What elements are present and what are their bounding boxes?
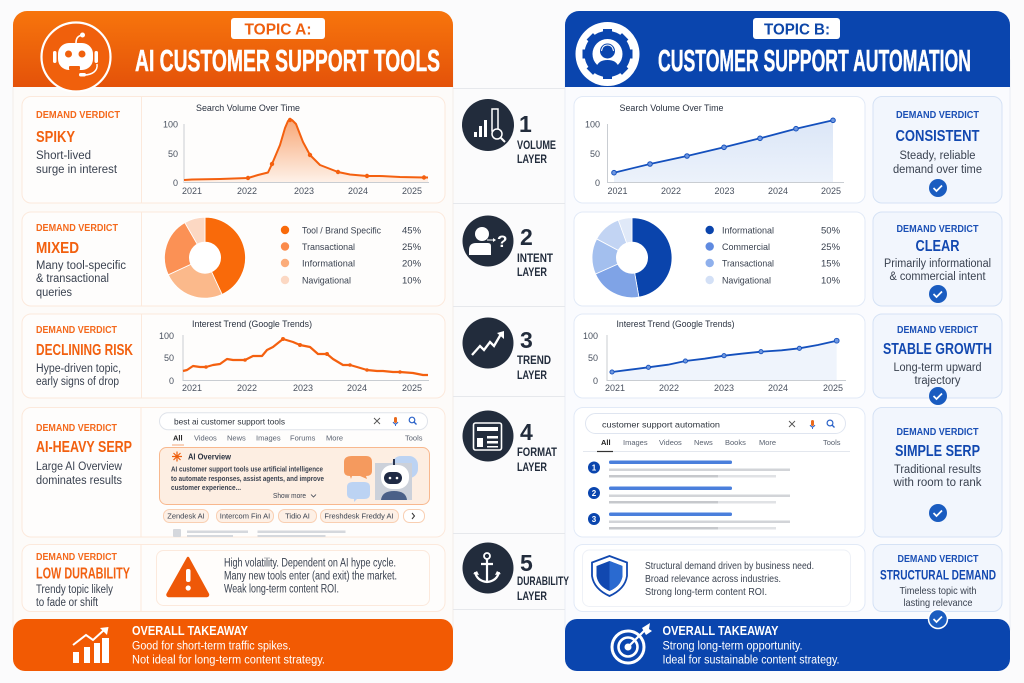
verdict: structural demand: Timeless topic with (900, 585, 977, 597)
verdict: spiky: SPIKY (36, 129, 76, 146)
note box: risks: Many new tools enter (and exit) the market. (224, 570, 397, 582)
verdict: mixed: & transactional (36, 273, 109, 285)
result 2: 2 (592, 489, 597, 498)
row: B durability (574, 544, 1002, 612)
header: topic A (13, 11, 453, 92)
note box: strengths: Structural demand driven by business need. (645, 561, 814, 572)
AI overview box: to automate responses, assist agents, and improve (171, 476, 324, 483)
row: B format (574, 408, 1002, 537)
verdict: low durability: DEMAND VERDICT (36, 552, 117, 563)
note box: risks: High volatility. Dependent on AI hype cycle. (224, 558, 396, 570)
row: A durability (22, 544, 445, 612)
line chart: interest trend A: 100 (159, 331, 174, 341)
donut chart and legend: intent B: 10% (821, 276, 841, 286)
line chart: search volume B: 0 (595, 178, 600, 188)
verdict: spiky (36, 110, 120, 176)
layer 3: trend: LAYER (517, 370, 548, 382)
layer 1: volume: LAYER (517, 154, 548, 166)
verdict: low durability: LOW DURABILITY (36, 566, 130, 582)
tabs A: Forums (290, 434, 316, 442)
takeaway: B: Strong long-term opportunity. (662, 640, 802, 652)
search result mockup B: News (694, 438, 713, 447)
line chart: search volume B: 50 (590, 149, 600, 159)
layer 3: trend: 3 (520, 327, 533, 353)
legend: intent A (281, 226, 422, 286)
note box: strengths (574, 544, 865, 612)
line chart: search volume A: 2025 (402, 186, 422, 196)
icon: robot headset (42, 22, 110, 92)
legend: intent A: Informational (302, 258, 355, 270)
donut chart and legend: intent B: Navigational (722, 276, 771, 286)
note box: risks (156, 550, 430, 606)
chips A: Freshdesk Freddy AI (324, 512, 394, 520)
line chart: interest trend B: Interest Trend (Google Trends) (616, 319, 734, 330)
row: B volume (574, 96, 1002, 203)
verdict: consistent: CONSISTENT (896, 128, 980, 145)
line chart: search volume B: 2022 (661, 186, 681, 196)
title: topic A: AI CUSTOMER SUPPORT TOOLS (135, 43, 440, 78)
verdict: AI-heavy SERP (36, 423, 132, 487)
icon: check (929, 179, 947, 197)
verdict: spiky: surge in interest (36, 164, 118, 176)
line chart: interest trend A (159, 319, 429, 393)
icon: warning (167, 558, 208, 596)
layer 2: intent: INTENT (517, 253, 553, 265)
line chart: search volume B (574, 96, 865, 203)
takeaway: A: Not ideal for long-term content strategy. (132, 654, 325, 666)
search result mockup B: Books (725, 438, 746, 447)
column: analysis layers (453, 88, 569, 610)
line chart: search volume B: 2025 (821, 186, 841, 196)
line chart: search volume A: 2021 (182, 186, 202, 196)
tabs A: Images (256, 434, 281, 442)
line chart: search volume A: 2024 (348, 186, 368, 196)
verdict: mixed: queries (36, 287, 72, 299)
verdict: low durability (36, 552, 130, 609)
icon: target (612, 623, 652, 663)
donut chart and legend: intent B: 15% (821, 258, 841, 270)
row: A intent (22, 212, 445, 306)
search result mockup B: All (601, 438, 611, 447)
donut chart and legend: intent B (574, 212, 865, 306)
line chart: interest trend B: 0 (593, 376, 598, 386)
chips A: Zendesk AI (167, 512, 205, 520)
donut chart: intent A (165, 217, 245, 298)
verdict: AI-heavy SERP: dominates results (36, 475, 122, 487)
icon: check (929, 285, 947, 303)
layer 3: trend: TREND (517, 355, 551, 367)
search result mockup B: More (759, 438, 776, 447)
line chart: interest trend B: 2021 (605, 383, 625, 393)
verdict: simple SERP (873, 408, 1002, 537)
search result mockup B: Tools (823, 438, 841, 447)
verdict: spiky: Short-lived (36, 150, 91, 162)
chips A: Tidio AI (285, 512, 310, 520)
result 3: 3 (592, 515, 597, 524)
layer 5: durability (462, 542, 569, 603)
legend: intent A: Tool / Brand Specific (302, 226, 381, 236)
row: B trend (574, 314, 1002, 405)
verdict: AI-heavy SERP: Large AI Overview (36, 461, 123, 473)
layer 2: intent: LAYER (517, 267, 548, 279)
icon: gear agent (576, 22, 640, 86)
note box: strengths: Broad relevance across industries. (645, 574, 781, 585)
row: A format (22, 408, 445, 537)
result 3 (588, 512, 790, 530)
verdict: declining risk: DEMAND VERDICT (36, 325, 117, 336)
search result mockup B: Videos (659, 438, 682, 447)
header: topic B (565, 11, 1010, 87)
takeaway: B (565, 619, 1010, 671)
donut chart and legend: intent B: 50% (821, 226, 841, 236)
chips A: Intercom Fin AI (220, 512, 270, 520)
row: B intent (574, 212, 1002, 306)
line chart: search volume B: 100 (585, 120, 600, 130)
verdict: simple SERP: DEMAND VERDICT (896, 427, 978, 438)
verdict: low durability: Trendy topic likely (36, 584, 113, 596)
line chart: search volume B: 2024 (768, 186, 788, 196)
verdict: declining risk: Hype-driven topic, (36, 363, 121, 375)
note box: strengths: Strong long-term content ROI. (645, 587, 767, 598)
verdict: spiky: DEMAND VERDICT (36, 110, 120, 121)
donut chart and legend: intent B: Commercial (722, 242, 770, 253)
chips A (164, 510, 424, 522)
AI overview box: AI customer support tools use artificial intelligence (171, 466, 323, 474)
verdict: AI-heavy SERP: AI-HEAVY SERP (36, 439, 132, 456)
icon: AI spark (172, 452, 182, 462)
verdict: clear: Primarily informational (884, 258, 991, 270)
result 1 (588, 460, 790, 478)
tabs A (172, 434, 423, 445)
verdict: clear: CLEAR (916, 238, 960, 255)
line chart: interest trend B: 2023 (714, 383, 734, 393)
line chart: interest trend A: 2023 (293, 383, 313, 393)
icon: growth bars (73, 627, 109, 663)
layer 2: intent: ? (497, 232, 507, 251)
line chart: interest trend B: 2022 (659, 383, 679, 393)
AI overview box: customer experience... (171, 485, 241, 492)
tabs A: Tools (405, 434, 423, 442)
verdict: structural demand: DEMAND VERDICT (898, 554, 978, 565)
verdict: consistent (873, 96, 1002, 203)
verdict: consistent: DEMAND VERDICT (896, 110, 979, 121)
takeaway: A (13, 619, 453, 671)
line chart: search volume A: 100 (163, 120, 178, 130)
icon: check (929, 504, 947, 522)
AI overview box (160, 448, 430, 504)
badge: topic A (231, 18, 325, 39)
panel: topic A (13, 11, 453, 671)
icon: chat robot (344, 456, 418, 502)
verdict: mixed: DEMAND VERDICT (36, 223, 118, 234)
line chart: interest trend B: 100 (583, 331, 598, 341)
line chart: interest trend B (574, 314, 865, 398)
line chart: interest trend A: 50 (164, 353, 174, 363)
verdict: stable growth: Long-term upward (894, 362, 982, 374)
legend: intent A: Transactional (302, 242, 355, 253)
verdict: clear (873, 212, 1002, 306)
search result mockup B: Images (623, 438, 648, 447)
takeaway: A: Good for short-term traffic spikes. (132, 640, 291, 652)
layer 1: volume: VOLUME (517, 140, 556, 152)
donut chart and legend: intent B: Transactional (722, 258, 774, 270)
layer 5: durability: LAYER (517, 591, 548, 603)
search result mockup B (574, 408, 865, 537)
icon: check (929, 387, 947, 405)
badge: topic A: TOPIC A: (244, 22, 312, 38)
line chart: search volume A (163, 103, 429, 196)
line chart: search volume A: 50 (168, 149, 178, 159)
verdict: stable growth: trajectory (914, 375, 961, 387)
verdict: simple SERP: with room to rank (893, 477, 982, 489)
line chart: interest trend A: 2025 (402, 383, 422, 393)
verdict: clear: & commercial intent (890, 271, 986, 283)
note box: risks: Weak long-term content ROI. (224, 584, 339, 596)
organic results placeholder A (173, 529, 346, 537)
line chart: interest trend A: 2024 (347, 383, 367, 393)
line chart: search volume B: 2021 (607, 186, 628, 196)
badge: topic B (753, 18, 840, 39)
legend: intent A: Navigational (302, 276, 351, 286)
tabs A: More (326, 434, 343, 442)
verdict: structural demand (873, 544, 1002, 612)
line chart: interest trend A: 2022 (237, 383, 257, 393)
verdict: clear: DEMAND VERDICT (896, 224, 978, 235)
legend: intent A: 10% (402, 276, 422, 286)
AI overview box: AI Overview (188, 452, 232, 462)
takeaway: A: OVERALL TAKEAWAY (132, 623, 248, 638)
verdict: low durability: to fade or shift (36, 597, 99, 609)
legend: intent A: 20% (402, 258, 422, 270)
search bar A (160, 413, 428, 430)
layer 4: format: FORMAT (517, 447, 557, 459)
line chart: interest trend A: 0 (169, 376, 174, 386)
layer 2: intent: 2 (520, 224, 533, 250)
line chart: search volume B: 2023 (714, 186, 735, 196)
verdict: mixed: Many tool-specific (36, 260, 126, 272)
icon: shield (592, 556, 627, 596)
line chart: interest trend A: Interest Trend (Google Trends) (192, 319, 312, 330)
layer 5: durability: DURABILITY (517, 576, 569, 588)
line chart: search volume B: Search Volume Over Time (620, 103, 724, 114)
verdict: simple SERP: Traditional results (894, 464, 981, 476)
panel: topic B (565, 11, 1010, 671)
legend: intent A: 25% (402, 242, 422, 253)
verdict: stable growth: STABLE GROWTH (883, 341, 992, 358)
layer 4: format (462, 410, 557, 474)
line chart: interest trend A: 2021 (182, 383, 202, 393)
line chart: search volume A: 0 (173, 178, 178, 188)
icon: check on takeaway (928, 610, 948, 628)
row: A volume (22, 96, 445, 203)
row: A trend (22, 314, 445, 398)
layer 4: format: LAYER (517, 462, 548, 474)
layer 2: intent (462, 216, 553, 279)
layer 5: durability: 5 (520, 550, 533, 576)
verdict: declining risk (36, 325, 134, 388)
result 1: 1 (592, 464, 597, 472)
search bar A: best ai customer support tools (174, 416, 285, 426)
verdict: stable growth (873, 314, 1002, 405)
layer 3: trend (462, 318, 551, 382)
layer 4: format: 4 (520, 419, 533, 445)
verdict: declining risk: DECLINING RISK (36, 342, 134, 359)
line chart: interest trend B: 50 (588, 353, 598, 363)
takeaway: B: OVERALL TAKEAWAY (662, 623, 779, 638)
search result mockup B: customer support automation (602, 420, 720, 430)
tabs A: Videos (194, 434, 217, 442)
badge: topic B: TOPIC B: (764, 22, 830, 38)
AI overview box: Show more (273, 493, 306, 500)
verdict: consistent: demand over time (893, 164, 982, 176)
search result mockup A (160, 413, 430, 537)
verdict: AI-heavy SERP: DEMAND VERDICT (36, 423, 117, 434)
verdict: stable growth: DEMAND VERDICT (897, 325, 978, 336)
layer 1: volume (462, 99, 556, 166)
legend: intent A: 45% (402, 226, 422, 236)
verdict: mixed (36, 223, 126, 299)
verdict: structural demand: lasting relevance (904, 597, 973, 609)
takeaway: B: Ideal for sustainable content strategy. (662, 654, 840, 666)
line chart: search volume A: 2022 (237, 186, 257, 196)
verdict: declining risk: early signs of drop (36, 376, 119, 388)
tabs A: News (227, 434, 246, 442)
line chart: search volume A: 2023 (294, 186, 314, 196)
verdict: simple SERP: SIMPLE SERP (895, 443, 980, 460)
line chart: search volume A: Search Volume Over Time (196, 103, 300, 114)
tabs A: All (173, 434, 183, 442)
donut chart and legend: intent B: Informational (722, 226, 774, 236)
verdict: consistent: Steady, reliable (900, 150, 976, 162)
line chart: interest trend B: 2025 (823, 383, 843, 393)
line chart: interest trend B: 2024 (768, 383, 788, 393)
verdict: mixed: MIXED (36, 240, 79, 257)
donut chart and legend: intent B: 25% (821, 242, 841, 253)
layer 1: volume: 1 (519, 111, 532, 137)
result 2 (588, 486, 790, 504)
